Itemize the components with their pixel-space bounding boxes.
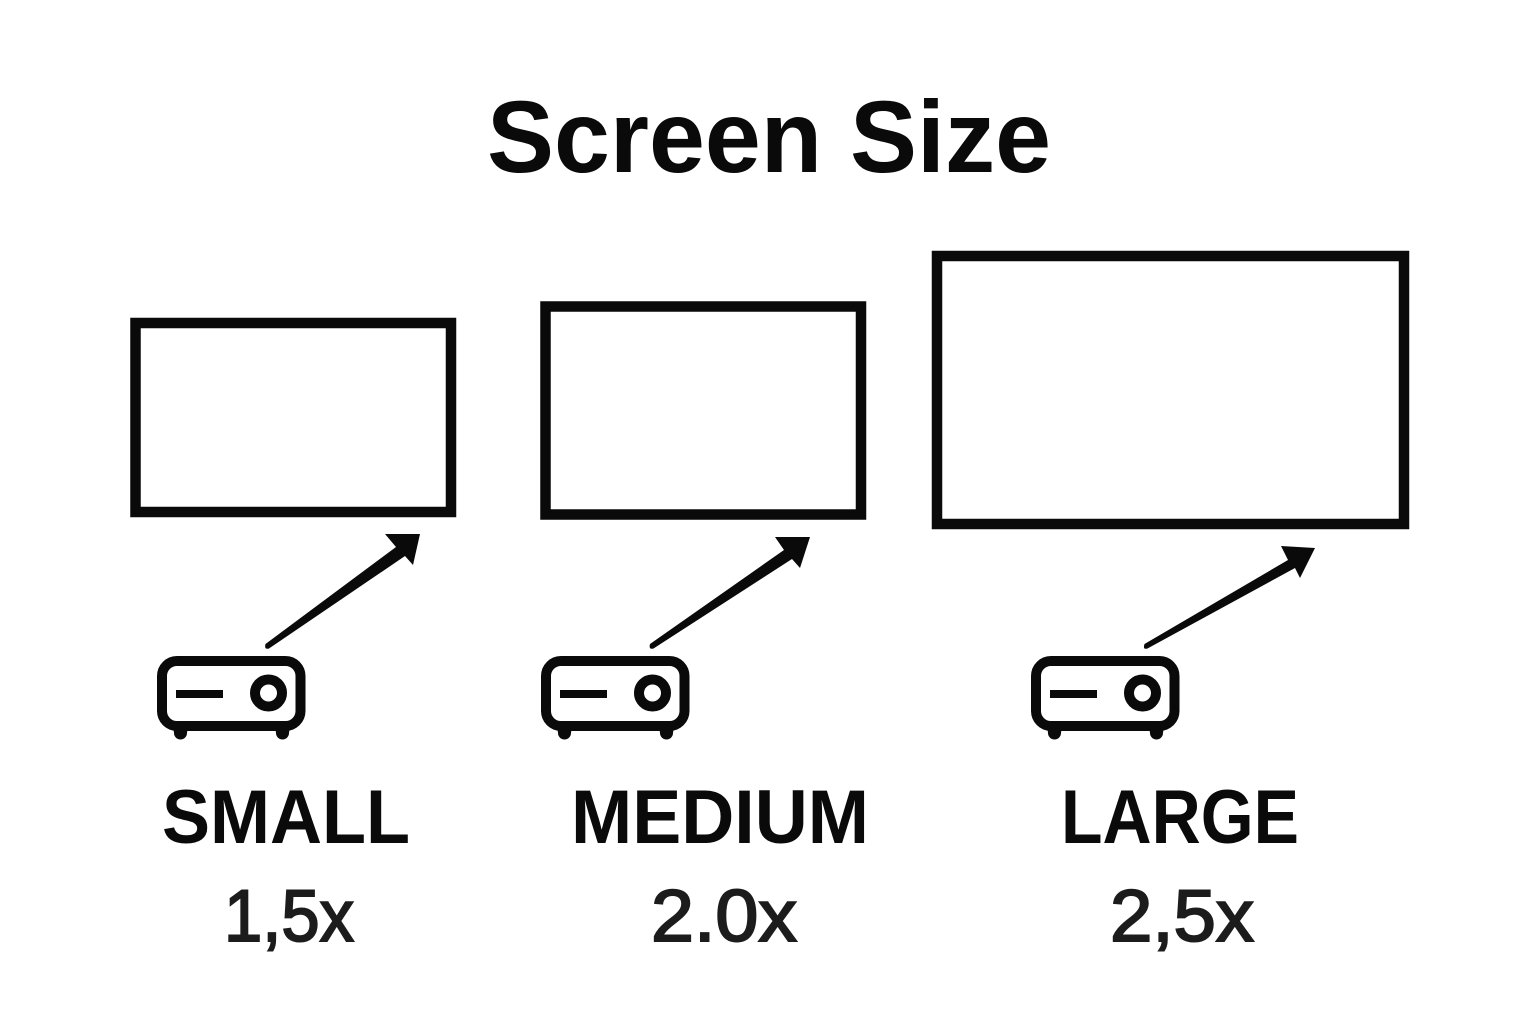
arrow: medium <box>650 537 810 649</box>
arrow: large <box>1144 546 1315 649</box>
value: large: 2,5x <box>1110 876 1254 957</box>
icon: projector large <box>1036 661 1174 740</box>
title: Screen Size <box>487 80 1051 194</box>
screen: large <box>937 256 1404 524</box>
screen: small <box>136 323 451 512</box>
label: medium: MEDIUM <box>571 775 869 860</box>
label: small: SMALL <box>162 775 410 860</box>
icon: projector medium <box>546 661 684 740</box>
panel: large <box>937 256 1404 957</box>
label: large: LARGE <box>1061 775 1299 860</box>
value: small: 1,5x <box>224 876 354 957</box>
icon: projector small <box>162 661 300 740</box>
panel: medium <box>546 306 869 957</box>
arrow: small <box>265 534 420 649</box>
screen: medium <box>546 306 861 514</box>
value: medium: 2.0x <box>651 876 797 957</box>
panel: small <box>136 323 451 957</box>
